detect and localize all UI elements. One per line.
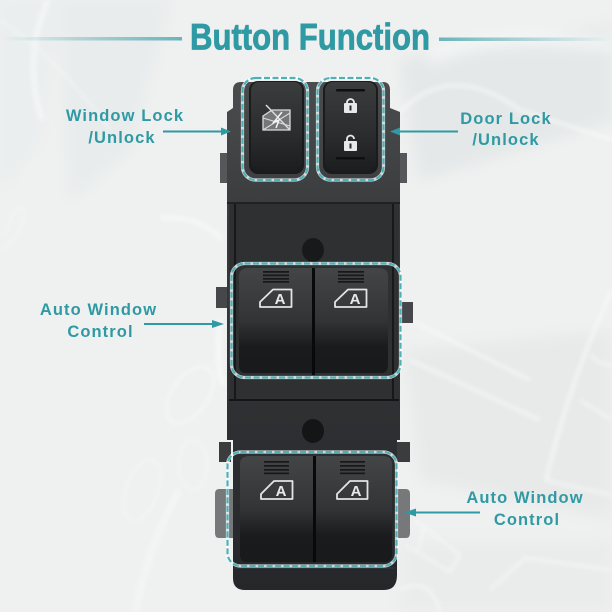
window switch unit	[215, 81, 413, 590]
icon: auto window	[337, 481, 368, 500]
label: window lock: Window Lock	[66, 107, 184, 125]
icon: auto window: A	[350, 291, 361, 308]
icon: auto window: A	[351, 483, 362, 500]
icon: auto window	[261, 481, 292, 500]
title rule right	[439, 38, 612, 41]
label: door lock	[460, 110, 552, 149]
label: window lock: /Unlock	[88, 129, 156, 147]
label: lower auto window control: Control	[494, 511, 560, 529]
icon: auto window	[335, 290, 366, 308]
label: lower auto window control	[466, 489, 584, 529]
label: window lock	[66, 107, 184, 147]
label: door lock: Door Lock	[460, 110, 552, 128]
dashed outlines around buttons	[228, 78, 400, 566]
arrow: lower auto window control	[404, 508, 480, 516]
screw recesses	[302, 238, 324, 262]
arrow: window lock	[163, 128, 231, 136]
label: lower auto window control: Auto Window	[466, 489, 584, 507]
label: upper auto window control: Control	[67, 323, 134, 341]
title: Button Function	[190, 16, 430, 58]
arrow: door lock	[390, 128, 458, 136]
icon: auto window	[260, 290, 292, 308]
label: door lock: /Unlock	[472, 131, 540, 149]
label: upper auto window control	[40, 301, 157, 341]
window lock button	[249, 81, 304, 174]
icon: auto window: A	[275, 291, 286, 308]
arrow: upper auto window control	[144, 320, 224, 328]
main housing	[227, 82, 400, 590]
icon: auto window: A	[276, 483, 287, 500]
upper auto window buttons	[239, 268, 388, 375]
lower auto window buttons	[240, 456, 392, 562]
icon: window lock	[263, 105, 290, 130]
side tabs	[215, 153, 413, 538]
title rule left	[2, 37, 182, 40]
door lock button	[323, 81, 378, 174]
icon: unlocked padlock	[344, 136, 357, 151]
icon: locked padlock	[344, 99, 357, 113]
label: upper auto window control: Auto Window	[40, 301, 157, 319]
